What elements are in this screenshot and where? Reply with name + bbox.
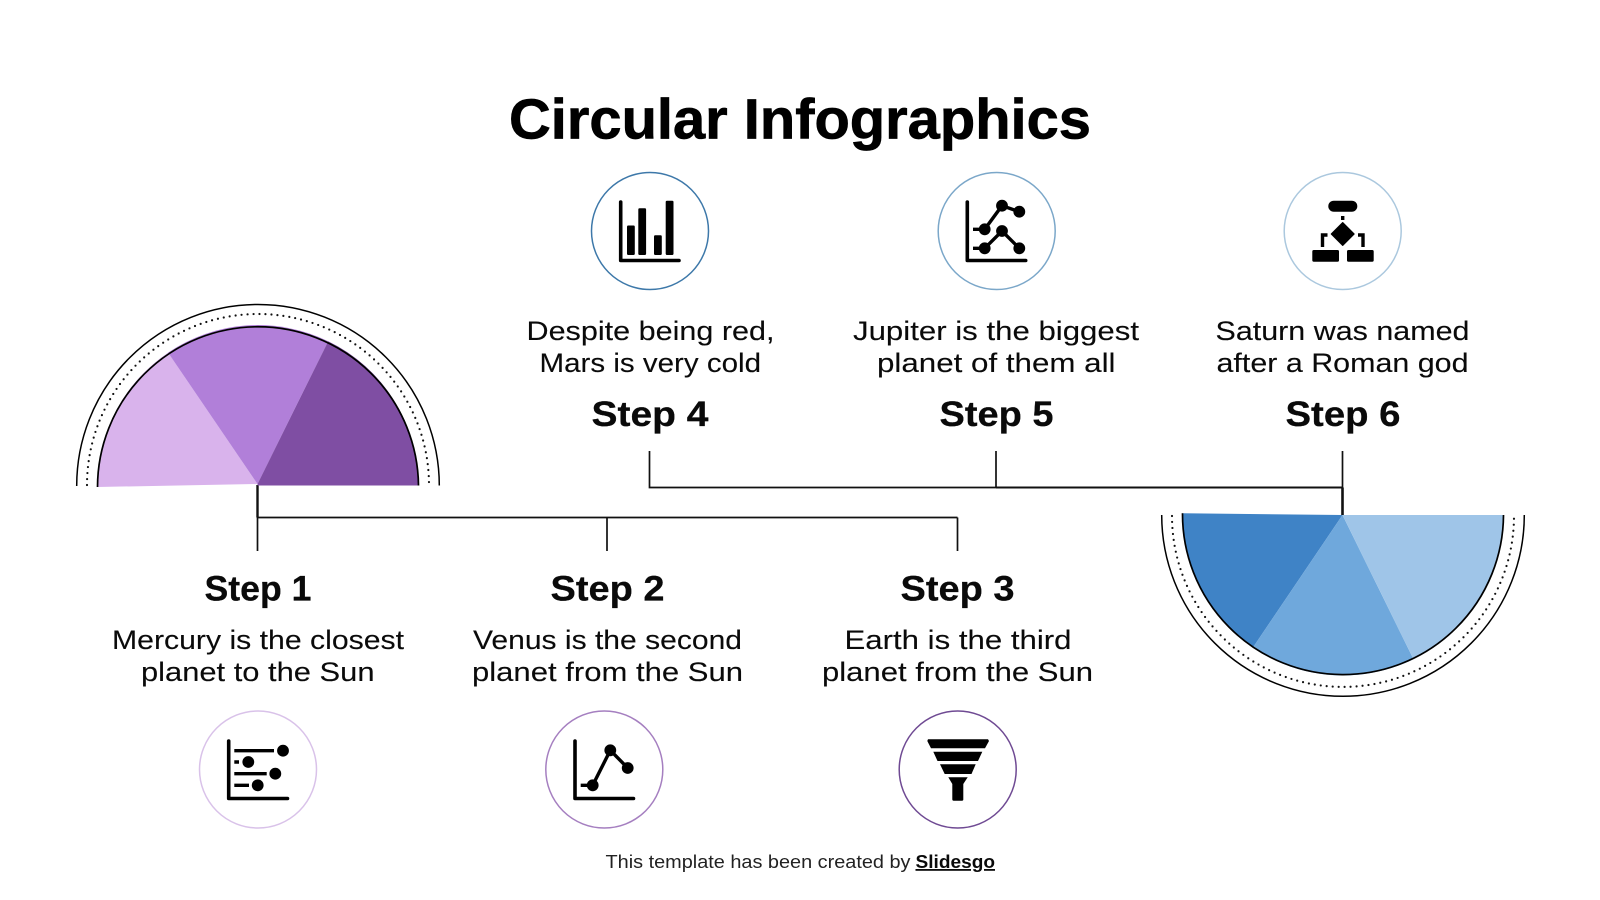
segment: dark purple [258, 341, 418, 486]
description: planet to the Sun [141, 657, 374, 687]
dotted ring [1172, 516, 1514, 687]
description: Despite being red, [526, 316, 774, 346]
description: planet from the Sun [472, 657, 743, 687]
footer credit: This template has been created by [606, 852, 910, 872]
icon: double line chart [938, 172, 1055, 290]
description: planet from the Sun [822, 657, 1093, 687]
description: Mercury is the closest [112, 625, 405, 655]
step 1 block [112, 570, 405, 828]
title: Circular Infographics [509, 88, 1091, 152]
description: Earth is the third [844, 625, 1072, 655]
segment: medium blue [1253, 515, 1414, 675]
blue half-circle pie [1162, 513, 1524, 696]
segment: light purple [98, 353, 258, 487]
description: Mars is very cold [540, 348, 761, 378]
footer credit: Slidesgo [916, 852, 995, 872]
description: planet of them all [877, 348, 1116, 378]
description: Jupiter is the biggest [853, 316, 1140, 346]
step 5 block [853, 172, 1140, 434]
connector lines: steps 1 to 3 [258, 485, 958, 551]
dotted ring [87, 314, 429, 485]
segment: medium purple [168, 325, 328, 484]
icon: line chart [546, 711, 663, 828]
inner ring [1182, 513, 1504, 675]
icon: dot plot [200, 711, 316, 828]
step label: Step 1 [204, 570, 312, 608]
icon: funnel [899, 711, 1016, 828]
connector lines: steps 4 to 6 [650, 451, 1342, 515]
description [822, 625, 1093, 687]
description: Saturn was named [1216, 316, 1470, 346]
description [853, 316, 1140, 378]
step label: Step 4 [592, 395, 709, 434]
outer ring [77, 304, 439, 486]
step label: Step 2 [550, 570, 664, 608]
description: after a Roman god [1216, 348, 1468, 378]
step label: Step 5 [940, 395, 1054, 434]
outer ring [1162, 515, 1524, 696]
segment: dark blue [1182, 513, 1342, 648]
step label: Step 6 [1286, 395, 1400, 434]
description [472, 625, 743, 687]
description [112, 625, 405, 687]
description: Venus is the second [473, 625, 742, 655]
description [1216, 316, 1470, 378]
segment: light blue [1342, 515, 1504, 659]
step 3 block [822, 570, 1093, 828]
purple half-circle pie [77, 304, 439, 487]
step 4 block [526, 172, 774, 434]
inner ring [98, 327, 418, 487]
icon: flowchart [1284, 172, 1401, 290]
step label: Step 3 [900, 570, 1014, 608]
icon: bar chart [592, 172, 708, 290]
step 2 block [472, 570, 743, 828]
step 6 block [1216, 172, 1470, 434]
description [526, 316, 774, 378]
